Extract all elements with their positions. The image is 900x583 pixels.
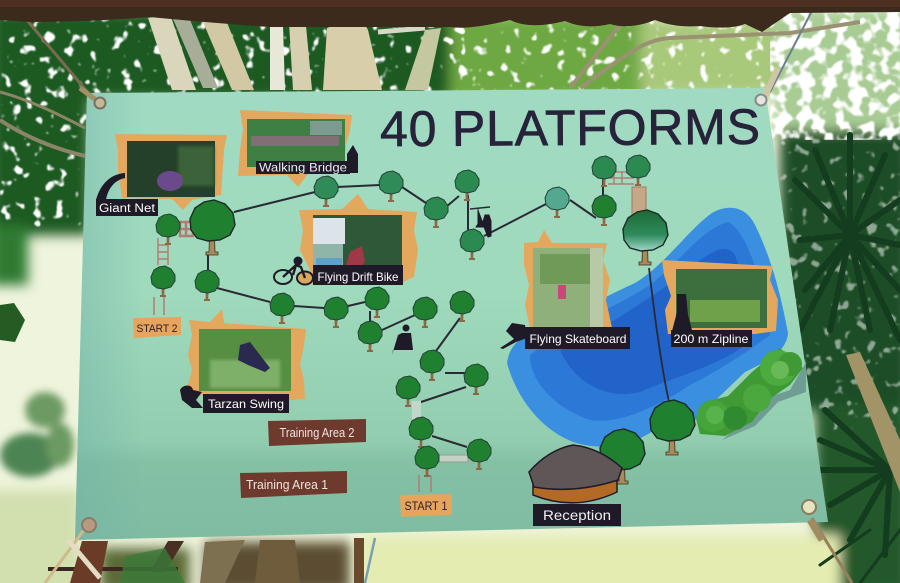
icon: zipline rider: [672, 294, 692, 331]
connecting cables: [208, 178, 669, 447]
photo: Tarzan Swing: Tarzan Swing: [208, 397, 284, 411]
bottom foreground: deck and roots: [48, 538, 375, 583]
sign: Start 1: [400, 494, 452, 517]
sign: Training Area 2: Training Area 2: [280, 425, 354, 440]
photo: Giant Net: [96, 134, 227, 216]
platform figure: [392, 324, 413, 355]
bridge: start 1: [438, 455, 468, 462]
sign: Training Area 2: [268, 419, 366, 446]
bridge: start 1 upper: [412, 401, 421, 419]
icon: walking figure: [347, 145, 358, 173]
banner: [75, 88, 828, 540]
sign: Training Area 1: Training Area 1: [246, 477, 328, 492]
sign: Training Area 1: [240, 471, 347, 498]
reception hut: [529, 445, 622, 503]
sign: Start 1: START 1: [404, 501, 448, 513]
zipline figure: [470, 207, 491, 237]
distant tree on far shore: [0, 392, 74, 477]
icon: cyclist: [274, 256, 313, 284]
birch trunks: [148, 10, 441, 90]
icon: tarzan figure: [180, 386, 203, 408]
branches and ropes behind banner: [0, 0, 860, 156]
sign: Reception: Reception: [543, 507, 611, 523]
platform trees: [151, 155, 695, 484]
sign: Start 2: START 2: [136, 323, 178, 335]
background: sky through leaves: [0, 10, 900, 430]
shrub shadow: [722, 362, 806, 440]
rope ladders and bridges: [154, 172, 634, 492]
shrubs by the lake: [696, 348, 803, 436]
sign: Start 2: [133, 317, 181, 338]
photo: Flying Skateboard: Flying Skateboard: [530, 332, 626, 346]
lake: [507, 208, 788, 447]
title: 40 PLATFORMS: [380, 99, 760, 157]
sign: Reception: [533, 504, 621, 526]
photo: Flying Drift Bike: Flying Drift Bike: [318, 270, 399, 284]
photo: 200 m Zipline: 200 m Zipline: [674, 332, 749, 346]
grommets and ropes: [45, 68, 852, 583]
photo: 200 m Zipline: [662, 260, 778, 347]
leaf cluster left edge: [0, 303, 25, 342]
photo: Walking Bridge: Walking Bridge: [259, 162, 347, 174]
photo: Walking Bridge: [238, 110, 358, 187]
icon: skateboarder: [500, 323, 527, 349]
photo: Giant Net: Giant Net: [99, 203, 156, 215]
tree trunk right: [846, 352, 900, 492]
photo: Tarzan Swing: [180, 309, 306, 413]
hatched tower: [632, 187, 646, 216]
photo: Flying Drift Bike: [274, 194, 418, 285]
thatched roof: [0, 0, 900, 32]
palm fronds right: [795, 135, 900, 583]
icon: giant net climber: [96, 173, 125, 200]
photo: Flying Skateboard: [500, 230, 630, 349]
